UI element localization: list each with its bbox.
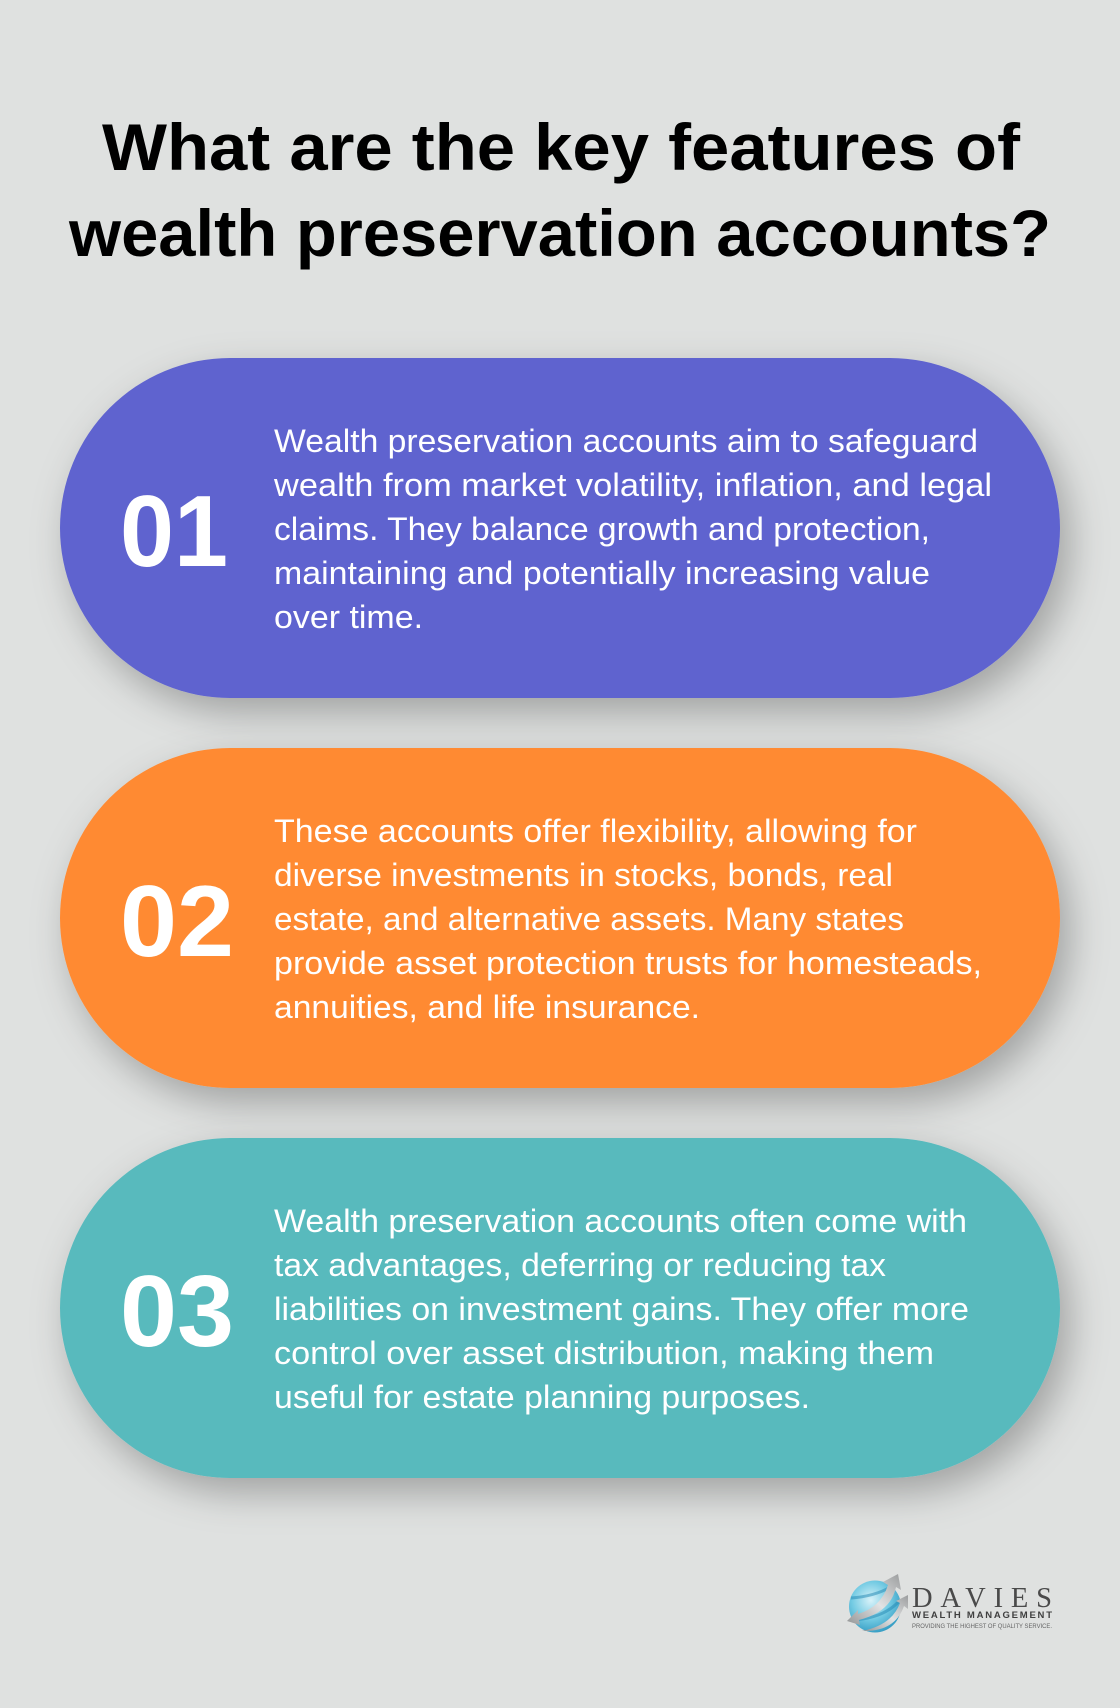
- logo: Davies Wealth Management: [847, 1574, 1052, 1632]
- icon: globe with arrows: [847, 1574, 908, 1632]
- text block: feature 02 description: These accounts offer flexibility, allowing for: [274, 813, 917, 849]
- pill: orange background: [60, 748, 1060, 1088]
- text block: feature 01 description: maintaining and potentially increasing value: [274, 555, 930, 591]
- text block: feature 02 description: diverse investments in stocks, bonds, real: [274, 857, 893, 893]
- text block: feature 02 description: [274, 813, 982, 1025]
- logo wordmark: WEALTH MANAGEMENT: [912, 1610, 1052, 1621]
- text block: feature 02 description: estate, and alternative assets. Many states: [274, 901, 904, 937]
- text block: feature 01 description: over time.: [274, 599, 423, 635]
- text block: feature 01 description: Wealth preservation accounts aim to safeguard: [274, 423, 978, 459]
- text block: feature 01 description: claims. They balance growth and protection,: [274, 511, 930, 547]
- text block: feature 03 description: Wealth preservation accounts often come with: [274, 1203, 967, 1239]
- title: What are the key features of: [102, 110, 1021, 184]
- logo wordmark: PROVIDING THE HIGHEST OF QUALITY SERVICE.: [912, 1623, 1052, 1630]
- number 01: 01: [120, 476, 228, 588]
- panel: feature 03: [60, 1138, 1060, 1478]
- text block: feature 03 description: [274, 1203, 969, 1415]
- panel: feature 02: [60, 748, 1060, 1088]
- title: [68, 110, 1051, 270]
- text block: feature 03 description: control over asset distribution, making them: [274, 1335, 934, 1371]
- text block: feature 01 description: wealth from market volatility, inflation, and legal: [273, 467, 992, 503]
- text block: feature 02 description: provide asset protection trusts for homesteads,: [274, 945, 982, 981]
- logo wordmark: DAVIES: [912, 1583, 1052, 1614]
- pill: teal background: [60, 1138, 1060, 1478]
- title: wealth preservation accounts?: [68, 196, 1051, 270]
- panel: feature 01: [60, 358, 1060, 698]
- text block: feature 03 description: liabilities on investment gains. They offer more: [274, 1291, 969, 1327]
- text block: feature 03 description: useful for estate planning purposes.: [274, 1379, 810, 1415]
- logo wordmark: [912, 1583, 1052, 1630]
- number 02: 02: [120, 866, 234, 978]
- text block: feature 01 description: [273, 423, 992, 635]
- number 03: 03: [120, 1256, 234, 1368]
- text block: feature 02 description: annuities, and life insurance.: [274, 989, 700, 1025]
- pill: purple background: [60, 358, 1060, 698]
- text block: feature 03 description: tax advantages, deferring or reducing tax: [274, 1247, 886, 1283]
